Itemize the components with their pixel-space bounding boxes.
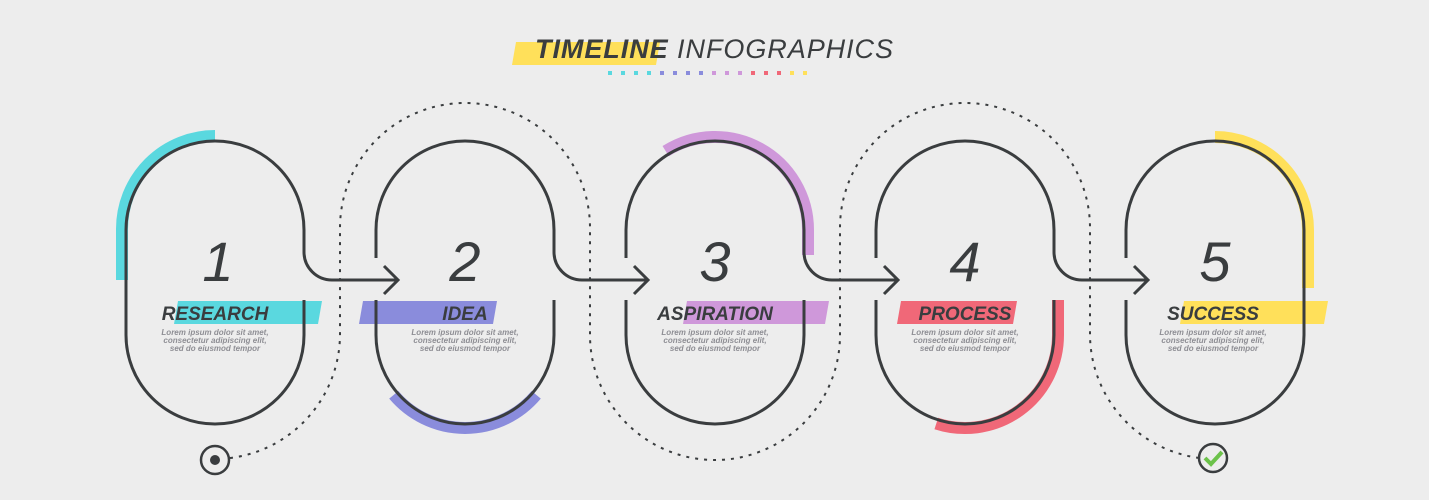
step 2: IDEA [442, 304, 488, 325]
step 1 [122, 136, 398, 424]
step 2: consectetur adipiscing elit, [413, 336, 517, 345]
step 4 [876, 141, 1148, 428]
step 3: 3 [699, 230, 731, 293]
step 4: consectetur adipiscing elit, [913, 336, 1017, 345]
step 5: Lorem ipsum dolor sit amet, [1159, 328, 1267, 337]
step 4: sed do eiusmod tempor [920, 344, 1011, 353]
step 1: consectetur adipiscing elit, [163, 336, 267, 345]
step 2 [359, 141, 648, 428]
step 2: sed do eiusmod tempor [420, 344, 511, 353]
step 4: PROCESS [919, 304, 1012, 325]
step 1: RESEARCH [162, 304, 270, 325]
step 3: consectetur adipiscing elit, [663, 336, 767, 345]
step 5: SUCCESS [1167, 304, 1259, 325]
step 1: Lorem ipsum dolor sit amet, [161, 328, 269, 337]
step 5 [1126, 137, 1328, 424]
step 3: sed do eiusmod tempor [670, 344, 761, 353]
step 3: Lorem ipsum dolor sit amet, [661, 328, 769, 337]
step 3: ASPIRATION [656, 304, 774, 325]
step 4: 4 [949, 230, 981, 293]
step 3 [626, 137, 898, 424]
icon: start target [201, 446, 229, 474]
step 4: Lorem ipsum dolor sit amet, [911, 328, 1019, 337]
icon: check [1199, 444, 1227, 472]
step 2: 2 [448, 230, 481, 293]
step 1: sed do eiusmod tempor [170, 344, 261, 353]
dotted path [230, 103, 1200, 460]
step 2: Lorem ipsum dolor sit amet, [411, 328, 519, 337]
title: TIMELINE INFOGRAPHICS [535, 34, 893, 64]
step 5: sed do eiusmod tempor [1168, 344, 1259, 353]
step 5: consectetur adipiscing elit, [1161, 336, 1265, 345]
title dots [608, 71, 807, 75]
step 1: 1 [202, 230, 234, 293]
step 5: 5 [1199, 230, 1231, 293]
